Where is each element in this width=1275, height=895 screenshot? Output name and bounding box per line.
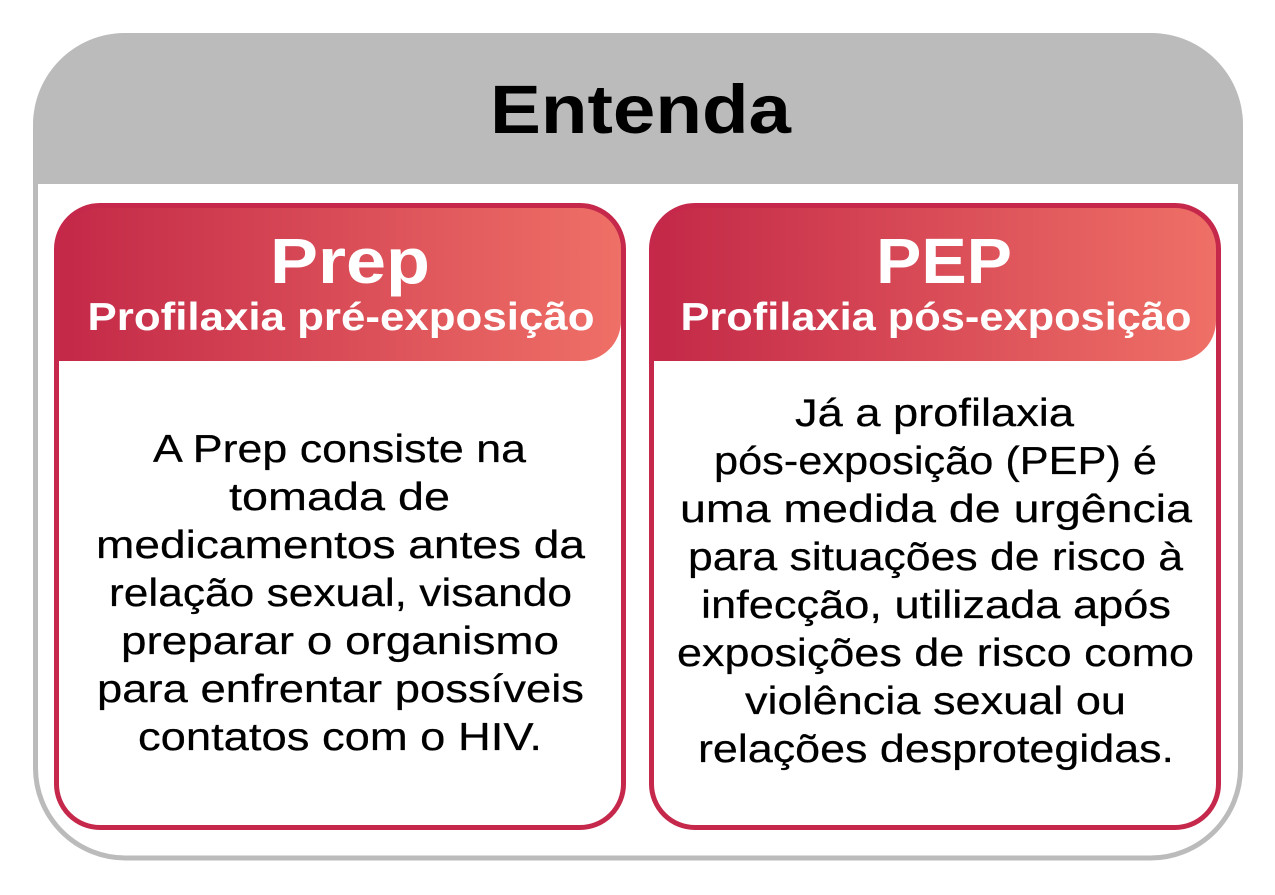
PEP text: relações desprotegidas. (698, 728, 1174, 771)
Prep text: relação sexual, visando (109, 572, 572, 615)
Prep text (96, 428, 586, 759)
PEP text: Já a profilaxia (795, 392, 1075, 435)
Prep heading (56, 205, 621, 361)
Prep text: medicamentos antes da (96, 524, 586, 567)
Prep text: A Prep consiste na (153, 428, 527, 471)
PEP card border (652, 206, 1218, 828)
Prep text: tomada de (229, 476, 450, 519)
PEP text (677, 392, 1194, 771)
PEP text: exposições de risco como (677, 632, 1194, 675)
PEP name: PEP (876, 225, 1012, 297)
header band (33, 33, 1243, 184)
Prep subtitle: Profilaxia pré-exposição (88, 296, 594, 339)
panel: Prep (56, 205, 624, 828)
Prep text: contatos com o HIV. (138, 716, 542, 759)
PEP text: infecção, utilizada após (701, 584, 1171, 627)
PEP text: violência sexual ou (745, 680, 1126, 723)
Prep text: preparar o organismo (121, 620, 559, 663)
PEP heading (651, 205, 1216, 361)
panel: PEP (651, 205, 1218, 828)
Prep card border (56, 206, 624, 828)
PEP text: para situações de risco à (688, 536, 1184, 579)
Prep name: Prep (270, 225, 430, 297)
PEP text: pós-exposição (PEP) é (714, 440, 1157, 483)
Prep heading background (56, 205, 621, 361)
title: Entenda (490, 71, 792, 148)
PEP heading background (651, 205, 1216, 361)
PEP text: uma medida de urgência (680, 488, 1193, 531)
PEP subtitle: Profilaxia pós-exposição (680, 296, 1192, 339)
Prep text: para enfrentar possíveis (97, 668, 584, 711)
